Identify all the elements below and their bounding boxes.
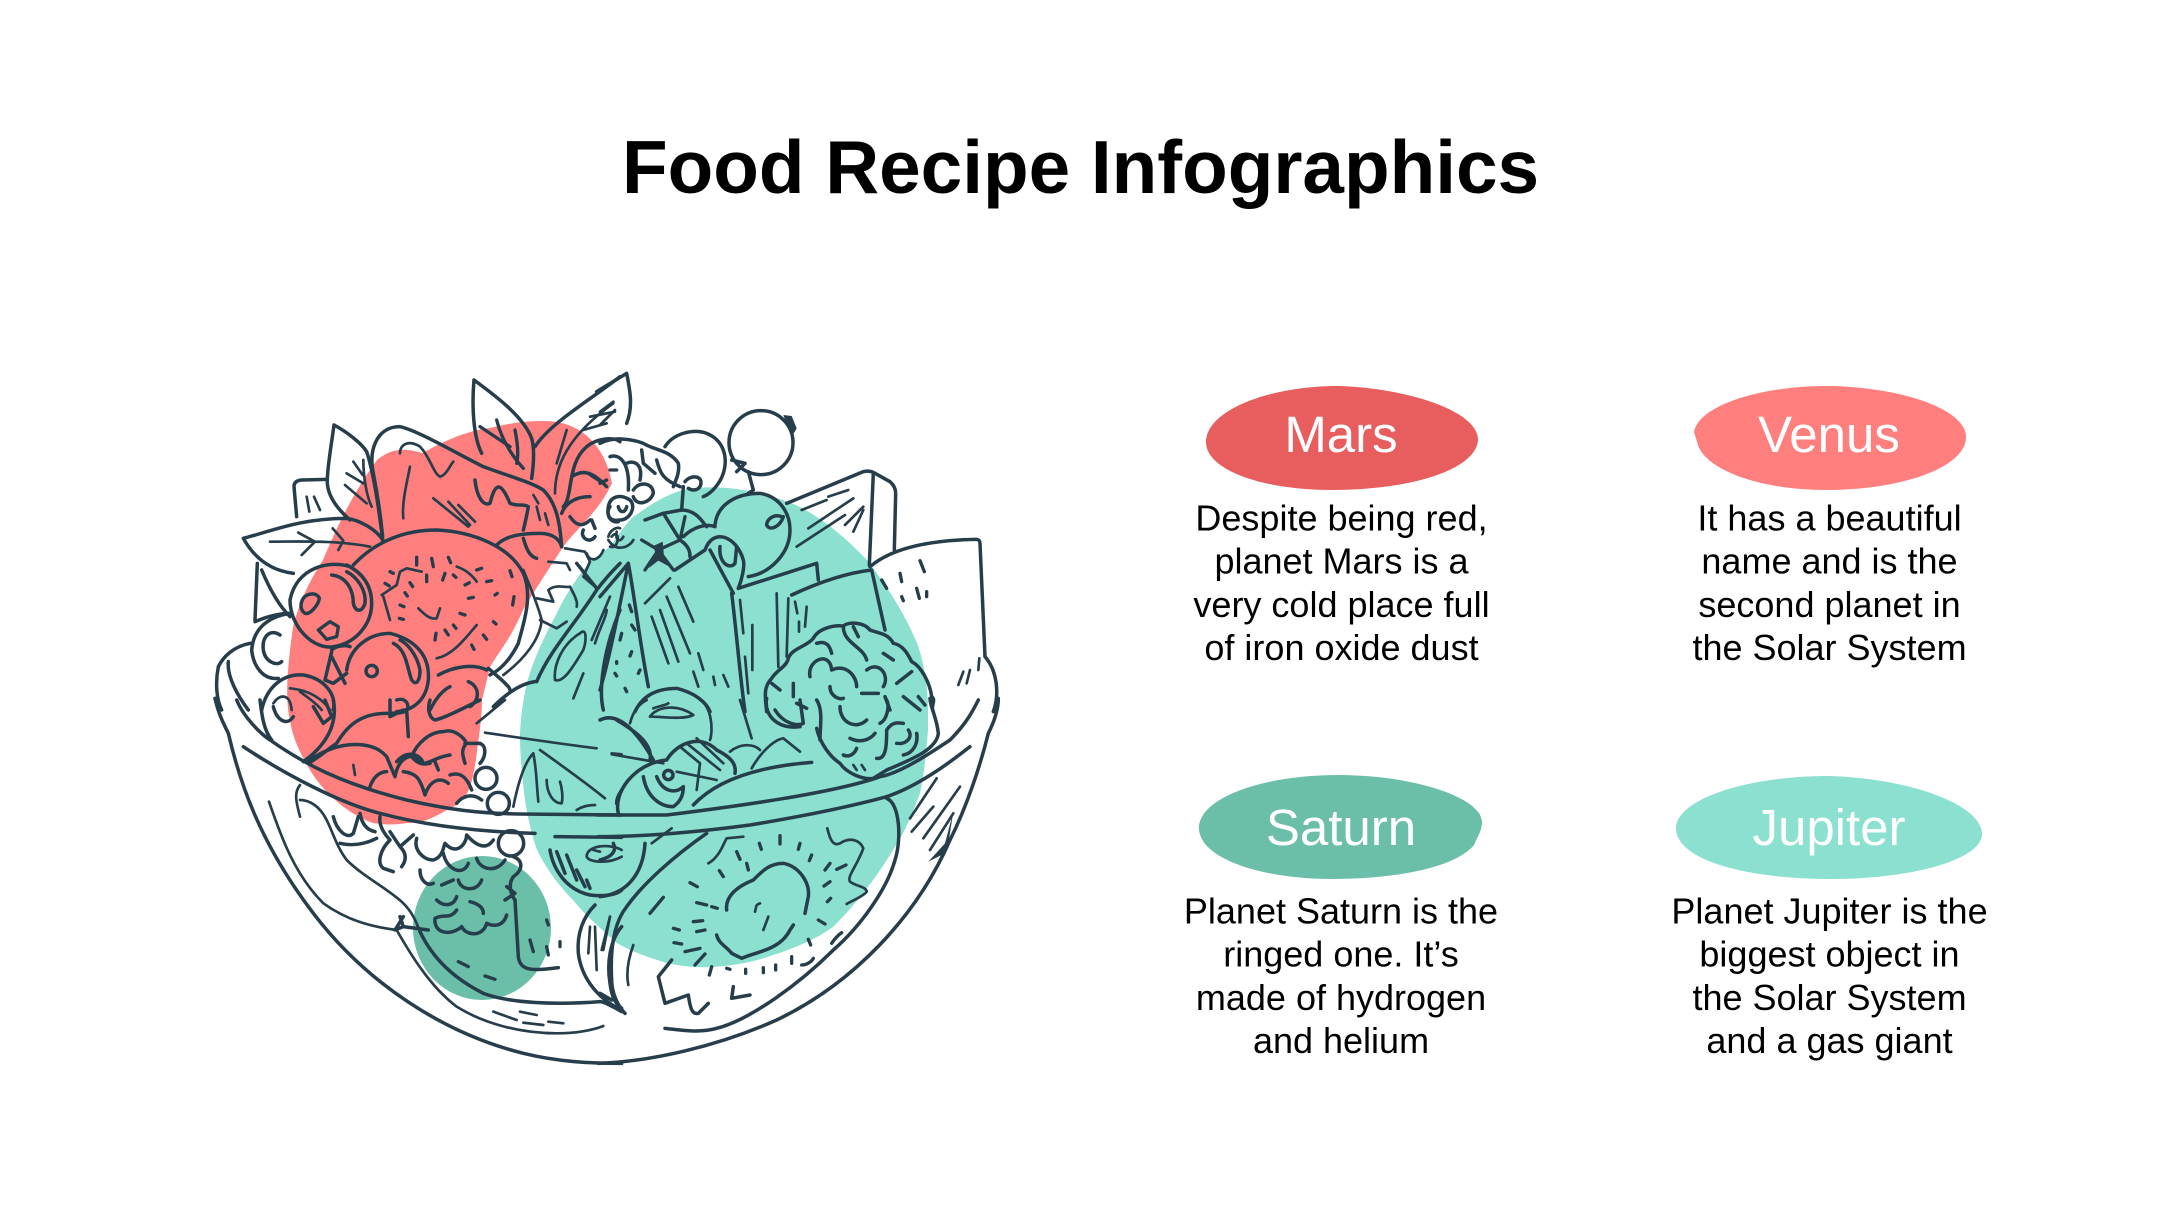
description: Saturn: and helium [1253,1020,1429,1061]
description: Jupiter: and a gas giant [1706,1020,1953,1061]
line art: upper left fruits [217,377,620,712]
pill: Jupiter [1676,776,1982,879]
panel: Venus [1692,386,1967,668]
line art: lower right bowl [597,698,998,1063]
description: Jupiter: the Solar System [1692,977,1967,1018]
line art: lower left bowl [215,698,622,1063]
description: Saturn: Planet Saturn is the [1184,890,1498,932]
illustration: salad bowl [215,373,998,1063]
pill: Saturn [1199,775,1482,879]
colour blob: red [287,421,612,824]
description: Jupiter: biggest object in [1699,934,1960,974]
pill label: Saturn: Saturn [1266,799,1416,856]
panel: Saturn [1184,775,1498,1061]
pill label: Jupiter: Jupiter [1752,799,1906,856]
description: Mars: planet Mars is a [1214,540,1470,582]
description: Saturn: made of hydrogen [1196,977,1486,1018]
panel: Jupiter [1671,776,1988,1061]
description: Mars: very cold place full [1193,584,1490,625]
colour blob: teal [520,487,928,967]
description: Venus: second planet in [1698,584,1961,625]
pill label: Mars: Mars [1284,406,1398,463]
pill: Mars [1206,386,1478,490]
description: Venus: name and is the [1701,540,1958,582]
pill: Venus [1694,386,1966,490]
colour blob: green [413,856,551,1000]
line art: upper right fruits and broccoli [597,373,997,712]
title: Food Recipe Infographics [622,125,1539,209]
description: Saturn: ringed one. It’s [1223,934,1459,974]
description: Mars: of iron oxide dust [1204,627,1479,668]
description: Venus: the Solar System [1692,627,1967,668]
pill label: Venus: Venus [1758,406,1900,463]
panel: Mars [1193,386,1490,668]
description: Mars: Despite being red, [1195,498,1488,538]
description: Jupiter: Planet Jupiter is the [1671,890,1988,932]
description: Venus: It has a beautiful [1697,498,1962,538]
